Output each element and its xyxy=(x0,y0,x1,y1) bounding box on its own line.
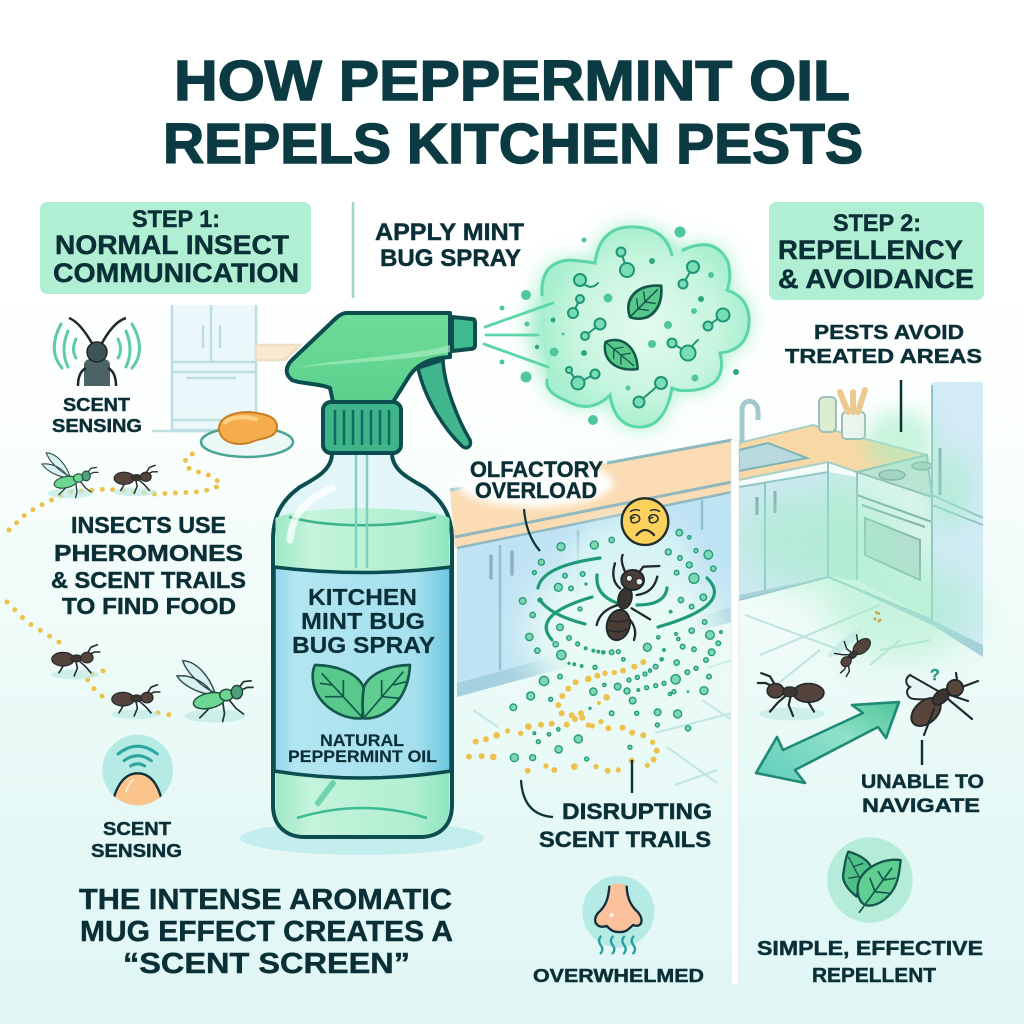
bottle label: MINT BUG xyxy=(301,608,425,634)
divider: top middle xyxy=(352,202,354,298)
text: scent screen conclusion: THE INTENSE AROMATIC xyxy=(79,884,452,916)
label: simple effective repellent xyxy=(757,938,983,987)
label: olfactory overload xyxy=(470,457,603,503)
scent swirl arcs xyxy=(538,558,714,640)
title: REPELS KITCHEN PESTS xyxy=(163,112,863,176)
divider: right section xyxy=(731,440,739,985)
label: unable to navigate xyxy=(861,772,984,817)
title xyxy=(163,49,863,176)
panel: step 1 heading: NORMAL INSECT xyxy=(55,230,290,260)
molecules xyxy=(566,248,730,408)
label: disrupting scent trails xyxy=(539,799,712,852)
leaves in cloud xyxy=(598,276,671,378)
heading: apply mint bug spray: BUG SPRAY xyxy=(380,245,521,272)
label: unable to navigate: UNABLE TO xyxy=(861,772,984,793)
icon: leaf badge xyxy=(827,837,913,923)
label: disrupting scent trails: SCENT TRAILS xyxy=(539,827,711,852)
spray bottle xyxy=(240,313,484,855)
panel: step 1 heading: COMMUNICATION xyxy=(53,258,299,288)
icon: dizzy face xyxy=(622,498,668,545)
label: scent sensing bottom xyxy=(91,819,182,861)
scent flecks xyxy=(874,612,881,622)
bottle label xyxy=(274,567,451,778)
kitchen background: middle counter and cabinets xyxy=(450,440,732,785)
label: simple effective repellent: SIMPLE, EFFECTIVE xyxy=(757,938,983,960)
label: olfactory overload: OLFACTORY xyxy=(470,457,603,482)
insect: fly 2 xyxy=(177,661,253,723)
double arrow xyxy=(756,702,899,783)
white glow behind olfactory label xyxy=(457,459,613,507)
panel: step 1 heading: STEP 1: xyxy=(132,206,220,233)
bottle body xyxy=(273,453,452,837)
text: scent screen conclusion: “SCENT SCREEN” xyxy=(123,948,410,980)
bottle label: KITCHEN xyxy=(308,584,417,610)
bottle label: PEPPERMINT OIL xyxy=(288,748,437,766)
insect: right walking ant xyxy=(758,673,825,720)
scent trail bottom xyxy=(7,602,254,720)
insect: central ant xyxy=(597,555,659,643)
text: insects use pheromones: & SCENT TRAILS xyxy=(51,567,246,593)
leader line: disrupting trails xyxy=(631,760,633,793)
label: simple effective repellent: REPELLENT xyxy=(812,965,936,987)
heading: apply mint bug spray xyxy=(375,219,524,272)
text: insects use pheromones xyxy=(51,512,246,619)
label: scent sensing top xyxy=(52,395,142,436)
label: scent sensing bottom: SCENT xyxy=(103,819,171,839)
insect: confused winged ant xyxy=(906,667,978,735)
panel: step 2 heading xyxy=(769,202,984,300)
text: scent screen conclusion: MUG EFFECT CREATES A xyxy=(80,916,453,948)
label: scent sensing bottom: SENSING xyxy=(91,841,182,861)
icon: nose overwhelmed xyxy=(582,876,654,953)
leader line: unable to navigate xyxy=(921,740,923,765)
cloud particles xyxy=(500,226,739,425)
panel: step 1 heading xyxy=(40,202,311,294)
cap xyxy=(323,402,401,453)
text: insects use pheromones: PHEROMONES xyxy=(54,540,243,566)
disrupted scent particles xyxy=(466,529,722,774)
icon: finger scent sensing xyxy=(102,735,173,810)
leader line: disrupting trails left xyxy=(521,780,553,817)
icon: food on plate xyxy=(201,412,293,457)
insect: confused winged ant: ? xyxy=(930,667,940,684)
icon: antennae bug xyxy=(54,318,140,386)
text: insects use pheromones: TO FIND FOOD xyxy=(62,593,236,619)
leader line: treated areas xyxy=(900,380,902,432)
spray head xyxy=(287,313,450,402)
label: overwhelmed: OVERWHELMED xyxy=(533,966,704,986)
label: scent sensing top: SCENT xyxy=(63,395,130,415)
heading: apply mint bug spray: APPLY MINT xyxy=(375,219,524,246)
insect: ant 1 xyxy=(113,465,157,496)
text: pests avoid treated areas: TREATED AREAS xyxy=(785,346,982,368)
text: pests avoid treated areas xyxy=(785,322,982,368)
trigger xyxy=(418,360,470,448)
bottle label: NATURAL xyxy=(320,732,404,750)
text: scent screen conclusion xyxy=(79,884,453,980)
insect: fly 1 xyxy=(42,453,98,498)
panel: step 2 heading: REPELLENCY xyxy=(778,235,963,265)
bottle label: BUG SPRAY xyxy=(292,632,435,658)
title: HOW PEPPERMINT OIL xyxy=(174,49,850,113)
scent cloud xyxy=(500,226,749,427)
spray lines xyxy=(484,303,553,367)
panel: step 2 heading: STEP 2: xyxy=(833,210,921,237)
label: scent sensing top: SENSING xyxy=(52,416,142,436)
insect: small ant in scent cloud xyxy=(825,626,878,678)
scent trail top xyxy=(9,453,221,530)
disrupted yellow trail xyxy=(466,659,660,774)
kitchen background: left cabinets xyxy=(152,305,300,433)
text: insects use pheromones: INSECTS USE xyxy=(71,512,226,538)
label: unable to navigate: NAVIGATE xyxy=(862,796,980,817)
insect: ant 2 xyxy=(51,645,100,679)
leader line: olfactory overload xyxy=(524,509,540,551)
insect: ant 3 xyxy=(111,685,160,719)
label: disrupting scent trails: DISRUPTING xyxy=(562,799,712,824)
text: pests avoid treated areas: PESTS AVOID xyxy=(814,322,964,344)
label: olfactory overload: OVERLOAD xyxy=(475,478,597,503)
panel: step 2 heading: & AVOIDANCE xyxy=(778,264,974,294)
kitchen background: right side xyxy=(739,382,983,690)
